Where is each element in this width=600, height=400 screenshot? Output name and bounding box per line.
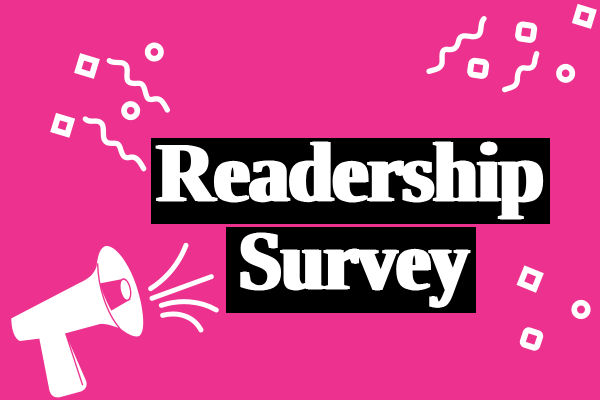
horn inner ellipse	[119, 279, 132, 300]
decorations: top right	[429, 8, 593, 90]
decorations: top left	[54, 45, 167, 169]
squiggle: short	[505, 54, 537, 90]
circle: upper	[148, 45, 161, 59]
horn inner tube	[100, 279, 131, 311]
circle	[559, 67, 572, 80]
square: lower	[470, 60, 487, 76]
squiggle: upper	[109, 61, 167, 110]
circle: lower	[124, 104, 137, 117]
circle	[574, 303, 588, 316]
icon: sound lines	[151, 245, 216, 330]
megaphone body, horn and handle	[11, 246, 143, 397]
horn rim line	[98, 263, 120, 329]
square: upper	[520, 269, 540, 289]
square: middle	[518, 24, 535, 40]
square: lower	[522, 330, 541, 348]
horn inner ellipse ring	[117, 277, 133, 302]
squiggle: lower	[85, 119, 144, 169]
decorations: bottom right	[520, 269, 588, 348]
icon: megaphone	[11, 246, 143, 397]
squiggle: long	[429, 19, 484, 71]
square: lower	[54, 117, 71, 134]
square: top	[576, 8, 593, 25]
square: upper	[78, 57, 96, 75]
handle slit	[66, 333, 83, 385]
